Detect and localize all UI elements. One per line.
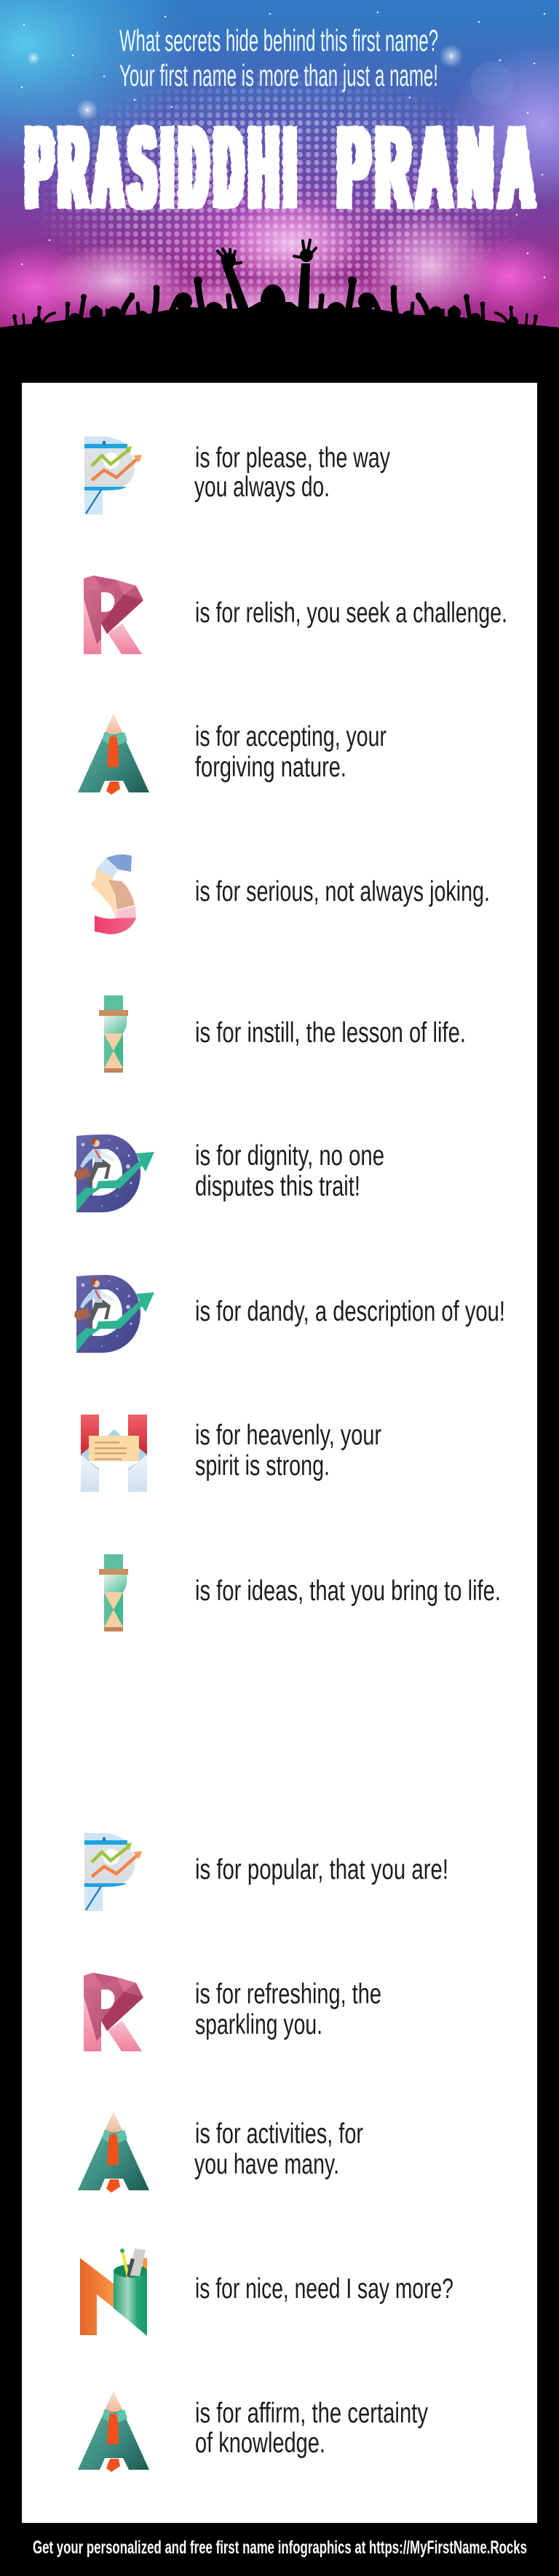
header banner — [0, 0, 559, 327]
text: affirm — [195, 2398, 428, 2459]
text: dignity: is for dignity, no one — [195, 1140, 384, 1172]
white content panel — [22, 383, 537, 1068]
title: name: PRANA — [338, 103, 541, 232]
text: refreshing: is for refreshing, the — [195, 1979, 381, 2010]
icon: D businessman on arrow — [74, 1134, 154, 1212]
icon: P presentation chart — [84, 437, 142, 514]
icon: D businessman on arrow — [74, 1275, 154, 1353]
dot matrix light wall — [43, 73, 517, 308]
row: R refreshing — [84, 1973, 381, 2051]
icon: N pencil holder — [80, 2249, 147, 2336]
text: instill: is for instill, the lesson of life. — [195, 1017, 466, 1049]
text: accepting: forgiving nature. — [195, 752, 346, 783]
text: refreshing — [195, 1979, 381, 2040]
text: please — [194, 442, 390, 503]
row: D dandy — [74, 1275, 505, 1353]
text: accepting: is for accepting, your — [195, 721, 386, 752]
row: D dignity — [74, 1134, 384, 1212]
sparkles — [21, 12, 545, 278]
row: I instill — [99, 995, 466, 1073]
text: activities: you have many. — [194, 2149, 339, 2180]
title: name — [26, 103, 541, 233]
crowd right half — [319, 277, 538, 339]
text: please: is for please, the way — [195, 442, 390, 474]
row: N nice — [80, 2249, 453, 2336]
row: A activities — [78, 2112, 363, 2193]
text: affirm: of knowledge. — [195, 2428, 325, 2459]
title: name: PRASIDDHI — [26, 103, 302, 233]
row: R relish — [84, 576, 507, 654]
tagline — [119, 23, 438, 92]
row: H heavenly — [81, 1415, 381, 1492]
row: P please — [84, 437, 390, 514]
icon: H envelope — [81, 1415, 147, 1492]
row: I ideas — [99, 1554, 501, 1631]
text: dignity: disputes this trait! — [195, 1171, 360, 1202]
icon: A suit and tie — [78, 714, 149, 795]
icon: I hourglass — [99, 1554, 128, 1631]
central figure with raised hands — [218, 240, 320, 342]
text: heavenly — [195, 1420, 381, 1482]
text: heavenly: spirit is strong. — [195, 1450, 330, 1482]
text: nice: is for nice, need I say more? — [195, 2273, 453, 2305]
icon: I hourglass — [99, 995, 128, 1073]
text: dignity — [195, 1140, 384, 1202]
icon: S handshake — [91, 854, 136, 934]
icon: R ruby gem — [84, 1973, 143, 2051]
text: activities — [194, 2118, 363, 2180]
text: refreshing: sparkling you. — [195, 2009, 322, 2040]
icon: R ruby gem — [84, 576, 143, 654]
text: please: you always do. — [194, 472, 330, 503]
row: A accepting — [78, 714, 386, 795]
row: A affirm — [78, 2391, 428, 2472]
banner sky gradient — [0, 0, 559, 364]
text: activities: is for activities, for — [195, 2118, 363, 2150]
icon: A suit and tie — [78, 2391, 149, 2472]
crowd silhouette — [0, 240, 559, 383]
text: affirm: is for affirm, the certainty — [195, 2398, 428, 2429]
icon: P presentation chart — [84, 1833, 142, 1911]
text: accepting — [195, 721, 386, 783]
text: popular: is for popular, that you are! — [195, 1854, 448, 1885]
icon: A suit and tie — [78, 2112, 149, 2193]
row: P popular — [84, 1833, 448, 1911]
text: heavenly: is for heavenly, your — [195, 1420, 381, 1451]
row: S serious — [91, 854, 490, 934]
